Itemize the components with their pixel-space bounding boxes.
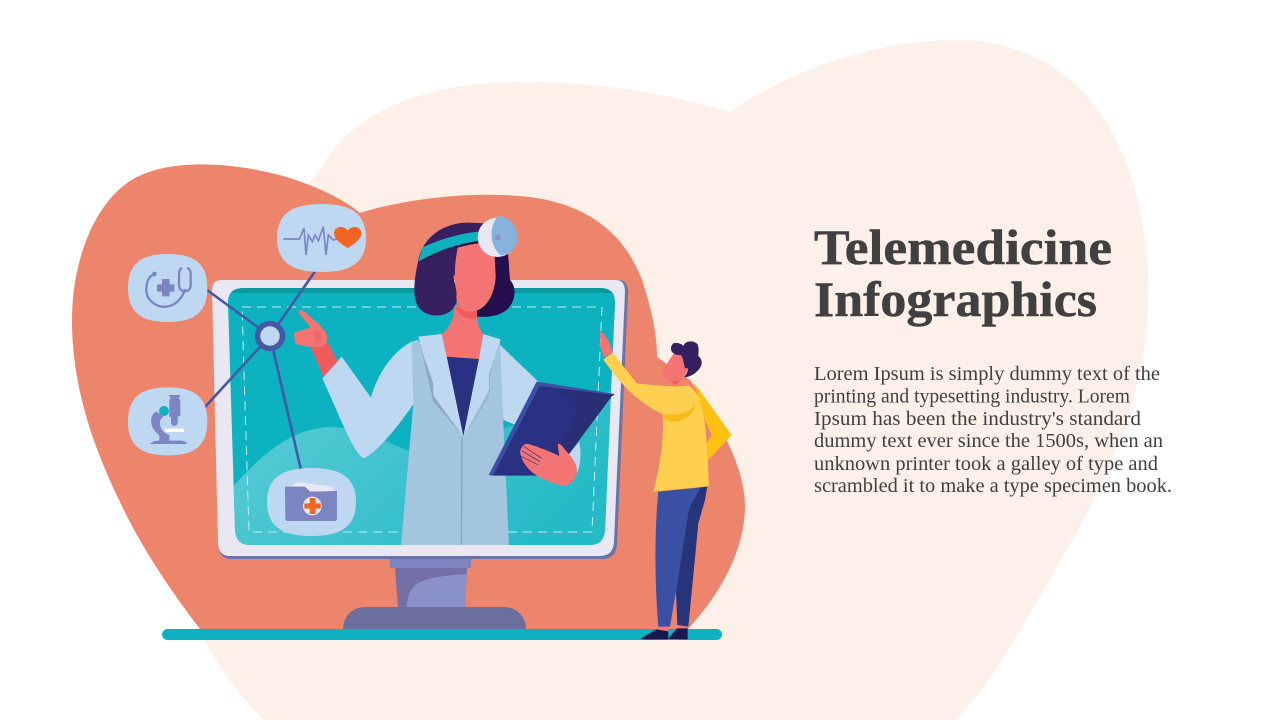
coat sleeves [322,340,581,477]
doctor [294,216,615,545]
shirt [447,357,479,437]
background blob: coral [72,164,745,629]
coat seam [459,437,464,545]
title [814,219,1112,327]
head mirror [478,216,517,257]
far leg [676,487,707,627]
icon: medical folder [267,468,356,536]
near leg [655,488,700,627]
patient figure [600,332,732,639]
monitor [212,280,628,559]
ankles [658,625,687,632]
title: Telemedicine [814,219,1112,275]
body text: Lorem Ipsum is simply dummy text of the [814,363,1160,385]
background blob: cream [170,40,1148,720]
hand on clipboard [520,444,577,485]
hub node [258,324,282,348]
body text: Ipsum has been the industry's standard [814,408,1141,430]
neck and face [662,353,687,386]
sweater [603,353,709,492]
raised hand [600,332,613,357]
monitor stand [343,558,526,629]
screen [220,285,625,550]
connector lines [205,270,316,470]
body text: unknown printer took a galley of type and [814,453,1158,475]
headband [418,232,478,263]
dashed stitching [242,307,602,532]
body text: scrambled it to make a type specimen book. [814,475,1172,497]
clipboard [489,382,615,476]
icon: stethoscope [128,254,207,322]
coat body [401,342,509,545]
body text [814,363,1172,497]
lapels [418,334,501,437]
body text: dummy text ever since the 1500s, when an [814,430,1163,452]
left forearm and hand [294,310,337,377]
back arm [694,383,732,460]
ground line [162,629,722,640]
hair [414,223,515,317]
hair [671,341,702,377]
neck [442,305,483,359]
icon: heart rate [277,204,366,272]
title: Infographics [814,271,1097,327]
body text: printing and typesetting industry. Lorem [814,386,1130,408]
monitor frame [216,280,628,559]
icon: microscope [128,387,207,455]
face [455,242,496,312]
shoes [641,628,688,639]
